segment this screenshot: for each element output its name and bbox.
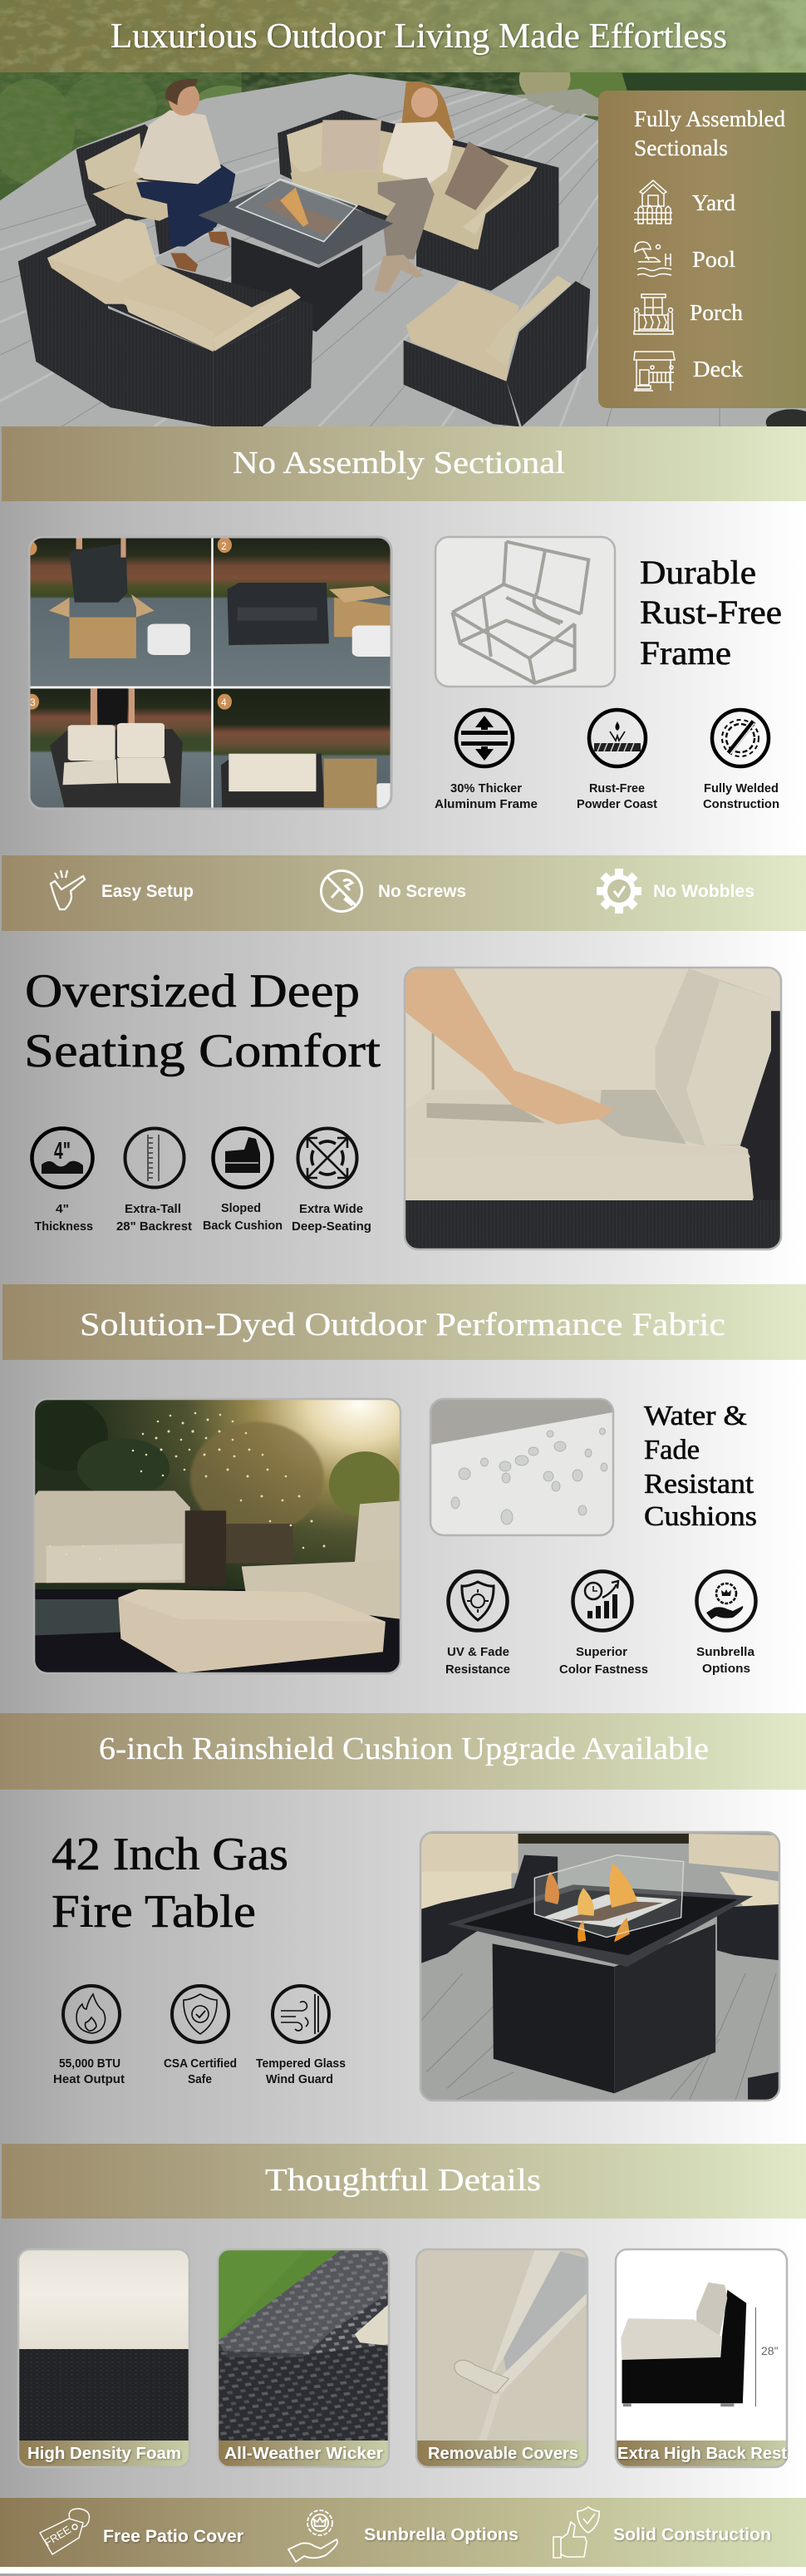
label: wind guard: Wind Guard (266, 2073, 333, 2086)
label: extra wide deep-seating: Deep-Seating (292, 1220, 371, 1234)
image: gas fire table (416, 1829, 786, 2108)
label: extra-tall backrest: 28" Backrest (116, 1220, 192, 1234)
label: sloped back cushion (203, 1202, 283, 1233)
label: powder coat (577, 782, 657, 811)
text: free patio cover: Free Patio Cover (103, 2527, 243, 2546)
collage: four setup steps: 3 (30, 697, 36, 708)
heading: oversized deep seating comfort: Seating Comfort (24, 1025, 381, 1077)
spray droplets (49, 1412, 326, 1559)
heading: 42 inch gas fire table: 42 Inch Gas (52, 1829, 288, 1880)
text: solid construction: Solid Construction (613, 2525, 771, 2544)
text: sunbrella options: Sunbrella Options (364, 2525, 518, 2544)
heading: water and fade resistant cushions: Resistant (644, 1469, 754, 1500)
icon: heat output (63, 1986, 120, 2042)
image: aluminum frame (435, 537, 615, 687)
label: thicker frame: 30% Thicker (450, 782, 522, 795)
label: 4 inch thickness: Thickness (35, 1220, 93, 1234)
label: extra-tall backrest: Extra-Tall (125, 1203, 181, 1216)
band: no assembly sectional: No Assembly Sectional (233, 446, 565, 480)
table top (447, 1884, 753, 1967)
label: powder coat: Powder Coast (577, 798, 657, 811)
right sofa (689, 1834, 779, 1871)
heading: 42 inch gas fire table (52, 1829, 288, 1938)
text: no screws: No Screws (378, 882, 466, 901)
band: solution-dyed fabric (2, 1284, 806, 1360)
collage: four setup steps: 2 (221, 540, 227, 552)
left sofa (420, 1834, 518, 1873)
heading: water and fade resistant cushions: Water & (644, 1401, 747, 1431)
label: heat output (53, 2057, 125, 2086)
label: uv and fade: UV & Fade (447, 1646, 509, 1659)
card: high density foam: High Density Foam (27, 2445, 181, 2463)
label: welded: Construction (703, 798, 779, 811)
label: sloped back cushion: Back Cushion (203, 1219, 283, 1233)
step 1 photo (29, 538, 211, 687)
strip: easy setup, no screws, no wobbles (2, 855, 806, 931)
icon: pool (635, 242, 671, 276)
band: rainshield upgrade (0, 1713, 806, 1790)
icon: yard (634, 180, 672, 224)
label: uv and fade: Resistance (445, 1663, 510, 1677)
icon: wind guard (273, 1986, 329, 2042)
text: yard: Yard (692, 190, 735, 215)
card: all-weather wicker: All-Weather Wicker (224, 2445, 383, 2463)
icon: sunbrella options (696, 1571, 756, 1631)
label: sloped back cushion: Sloped (221, 1202, 261, 1215)
label: extra-tall backrest (116, 1203, 192, 1234)
image: water spray on cushions (26, 1396, 404, 1682)
text: porch: Porch (690, 300, 743, 325)
front sectional (18, 215, 313, 407)
heading: durable rust-free frame (640, 554, 782, 672)
label: csa certified: Safe (188, 2073, 212, 2086)
panel: fully assembled sectionals (598, 91, 806, 408)
label: thicker frame: Aluminum Frame (435, 798, 538, 811)
heading: durable rust-free frame: Durable (640, 554, 756, 591)
card: removable covers: Removable Covers (428, 2445, 578, 2463)
icon: powder coat (589, 710, 646, 766)
band: thoughtful details: Thoughtful Details (265, 2163, 541, 2198)
label: color fastness: Color Fastness (559, 1663, 648, 1677)
label: 4 inch thickness (35, 1203, 93, 1234)
text: deck: Deck (693, 357, 744, 382)
top band of hero (0, 0, 806, 72)
label: csa certified: CSA Certified (164, 2057, 237, 2071)
label: sunbrella options (696, 1646, 755, 1676)
label: heat output: 55,000 BTU (59, 2057, 120, 2071)
label: uv and fade (445, 1646, 510, 1677)
icon: thumbs up and shield (553, 2507, 599, 2558)
label: extra wide deep-seating (292, 1203, 371, 1234)
label: csa certified (164, 2057, 237, 2086)
label: wind guard: Tempered Glass (256, 2057, 346, 2071)
band: rainshield upgrade: 6-inch Rainshield Cushion Upgrade Available (99, 1731, 709, 1766)
text: no wobbles: No Wobbles (653, 882, 754, 901)
step 2 photo (214, 538, 396, 687)
icon: welded (712, 710, 769, 766)
text: pool: Pool (692, 247, 735, 272)
card: extra high back rest: Extra High Back Rest (617, 2445, 787, 2463)
label: sunbrella options: Options (702, 1662, 750, 1676)
heading: 42 inch gas fire table: Fire Table (52, 1886, 256, 1938)
card: high density foam (17, 2249, 191, 2469)
icon: no wobbles (597, 869, 641, 914)
icon: 4 inch thickness (32, 1129, 93, 1187)
image: hand pressing seat cushion (404, 965, 784, 1253)
hero photo: patio sectional with fire table (0, 0, 806, 436)
card: extra high back rest: 28" (761, 2344, 779, 2357)
label: powder coat: Rust-Free (589, 782, 645, 795)
label: color fastness: Superior (576, 1646, 627, 1659)
heading: durable rust-free frame: Frame (640, 634, 731, 672)
label: welded (703, 782, 779, 811)
icon: color fastness (573, 1571, 632, 1631)
title: Luxurious Outdoor Living Made Effortless (111, 17, 727, 56)
icon: hand (51, 870, 85, 909)
back-left chair (76, 124, 214, 254)
label: thicker frame (435, 782, 538, 811)
heading: water and fade resistant cushions: Cushions (644, 1501, 757, 1532)
text: easy setup: Easy Setup (101, 882, 194, 901)
icon: extra-tall backrest (125, 1129, 184, 1187)
label: wind guard (256, 2057, 346, 2086)
icon: deck (634, 352, 675, 391)
step 4 photo (214, 688, 392, 808)
card: extra high back rest (615, 2249, 789, 2469)
woman (401, 81, 455, 141)
image: water droplets on fabric (430, 1399, 613, 1535)
back sectional (278, 110, 558, 291)
fire table (231, 237, 362, 332)
card: all-weather wicker (217, 2249, 391, 2469)
label: welded: Fully Welded (704, 782, 779, 795)
heading: water and fade resistant cushions: Fade (644, 1435, 700, 1465)
label: sunbrella options: Sunbrella (696, 1646, 755, 1659)
table base (493, 1943, 614, 2093)
icon: csa certified (172, 1986, 229, 2042)
step badges (22, 537, 232, 710)
label: extra wide deep-seating: Extra Wide (299, 1203, 363, 1216)
icon: uv and fade (449, 1571, 507, 1631)
label: color fastness (559, 1646, 648, 1677)
label: 4 inch thickness: 4" (56, 1203, 69, 1216)
card: removable covers (415, 2249, 589, 2469)
band: solution-dyed fabric: Solution-Dyed Outdoor Performance Fabric (80, 1307, 725, 1342)
icon: thicker frame (456, 710, 513, 766)
collage: four setup steps (22, 535, 396, 811)
icon: no screws (321, 871, 362, 911)
band: no assembly sectional (2, 426, 806, 501)
panel heading (634, 106, 785, 160)
panel heading: Sectionals (634, 135, 728, 160)
panel heading: Fully Assembled (634, 106, 785, 131)
man (136, 165, 235, 247)
heading: oversized deep seating comfort: Oversized Deep (25, 965, 360, 1017)
band: thoughtful details (2, 2144, 806, 2219)
strip: free cover, sunbrella, solid construction (0, 2498, 806, 2574)
icon: sloped back cushion (213, 1129, 273, 1187)
burner (543, 1894, 677, 1928)
collage: four setup steps: 4 (221, 697, 227, 708)
icon: free tag (40, 2509, 90, 2554)
heading: oversized deep seating comfort (24, 965, 381, 1077)
icon: sunbrella hand (288, 2510, 337, 2562)
heading: water and fade resistant cushions (644, 1401, 757, 1532)
icon: extra wide deep-seating (297, 1129, 357, 1187)
icon: free tag: FREE (42, 2523, 73, 2549)
step 3 photo (29, 688, 211, 808)
heading: durable rust-free frame: Rust-Free (640, 594, 782, 631)
label: heat output: Heat Output (53, 2073, 125, 2086)
icon: 4 inch thickness: 4" (54, 1138, 71, 1165)
icon: porch (634, 294, 673, 334)
front right chair (404, 340, 519, 426)
